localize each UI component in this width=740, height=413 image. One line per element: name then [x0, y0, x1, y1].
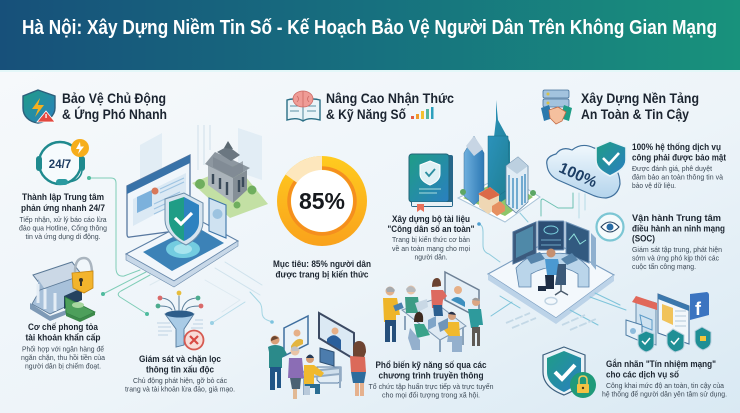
illustration: city skyline: [458, 100, 540, 222]
illustration: bank with padlock and cash: [30, 258, 95, 322]
icon: shield with warning: [23, 90, 55, 123]
text: monitoring and filtering: thông tin xấu độc: [146, 364, 214, 374]
text: emergency account freeze: Cơ chế phong tỏa: [28, 322, 98, 332]
text: handbook: [388, 214, 474, 262]
icon: safety handbook: [409, 154, 453, 212]
text: SOC: (SOC): [632, 234, 655, 244]
icon: cloud with 100% and shield: 100%: [556, 160, 600, 191]
text: trust label: Gắn nhãn "Tín nhiệm mạng": [606, 358, 716, 369]
text: emergency account freeze: [21, 322, 105, 370]
icon: servers and handshake: [541, 90, 572, 124]
text: trust label: Công khai mức độ an toàn, tin cậy của: [606, 381, 724, 390]
heading: proactive protection: [62, 91, 167, 122]
illustration: security operations centre: [488, 193, 626, 330]
text: 24/7 response center: Tiếp nhận, xử lý báo cáo lừa: [20, 215, 107, 224]
heading: safe and trusted foundation: [581, 91, 699, 122]
panel: proactive protection: [19, 90, 268, 394]
connector lines: left column: [87, 176, 262, 325]
text: SOC: [632, 213, 725, 271]
heading: awareness and skills: & Kỹ Năng Số: [326, 107, 406, 122]
icon: eye in ring: [596, 214, 624, 240]
icon: cloud with 100% and shield: [547, 141, 626, 198]
text: emergency account freeze: tài khoản khẩn cấp: [26, 332, 101, 342]
text: skills dissemination: [368, 360, 494, 400]
text: monitoring and filtering: trang và tài khoản lừa đảo, giả mạo.: [125, 384, 235, 394]
text: 24/7 response center: tin và ứng dụng di động.: [26, 232, 100, 241]
heading: safe and trusted foundation: Xây Dựng Nền Tảng: [581, 91, 699, 106]
text: 24/7 response center: [19, 192, 107, 241]
text: trust label: cho các dịch vụ số: [606, 370, 680, 380]
text: monitoring and filtering: Giám sát và chặn lọc: [139, 354, 221, 364]
text: monitoring and filtering: Chủ động phát hiện, gỡ bỏ các: [133, 376, 227, 385]
heading: awareness and skills: Nâng Cao Nhận Thức: [326, 91, 454, 106]
heading: awareness and skills: [326, 91, 454, 122]
text: SOC: Vận hành Trung tâm: [632, 213, 721, 223]
connector lines: centre: [250, 213, 528, 324]
text: skills dissemination: cho mọi đối tượng trong xã hội.: [382, 390, 480, 400]
text: emergency account freeze: người dân bị chiếm đoạt.: [25, 362, 101, 370]
heading: safe and trusted foundation: An Toàn & Tin Cậy: [581, 107, 689, 122]
text: skills dissemination: chương trình truyền thông: [378, 370, 484, 380]
text: 24/7 response center: phản ứng nhanh 24/7: [21, 203, 105, 213]
icon: 24/7 clock headset: 24/7: [49, 159, 71, 171]
text: skills dissemination: Tổ chức tập huấn trực tiếp và trực tuyến: [368, 382, 494, 391]
icon: filter funnel: [156, 291, 204, 350]
icon: brain on open book: [287, 91, 320, 121]
chart: 85% donut: [277, 156, 367, 246]
text: 100% secured services: 100% hệ thống dịch vụ: [632, 142, 721, 152]
text: SOC: Giám sát tập trung, phát hiện: [632, 245, 722, 254]
text: 85% target: [273, 259, 371, 280]
panel: safe and trusted foundation: [541, 90, 727, 398]
text: handbook: người dân.: [414, 252, 448, 262]
text: monitoring and filtering: [125, 354, 235, 394]
illustration: online services with trust badges: f: [695, 299, 702, 319]
illustration: online services with trust badges: [626, 292, 711, 352]
text: 24/7 response center: đảo qua Hotline, Cổng thông: [19, 224, 107, 232]
icon: signal bars: [411, 107, 434, 119]
heading: proactive protection: Bảo Vệ Chủ Động: [62, 91, 166, 106]
text: 24/7 response center: Thành lập Trung tâm: [22, 192, 104, 202]
text: trust label: hệ thống để người dân yên tâm sử dụng.: [602, 390, 727, 398]
text: 85% target: được trang bị kiến thức: [276, 270, 369, 280]
illustration: laptop screen with shield and Hanoi tower: [126, 125, 268, 287]
icon: 24/7 clock headset: [36, 139, 89, 185]
text: skills dissemination: Phổ biến kỹ năng số qua các: [376, 360, 487, 370]
title banner: [0, 0, 740, 72]
illustration: training group around a table: [383, 272, 483, 352]
text: 100% secured services: [632, 142, 726, 190]
text: handbook: "Công dân số an toàn": [388, 224, 474, 234]
icon: shield with padlock: [543, 347, 596, 398]
text: emergency account freeze: ngăn chặn, thu hồi tiền của: [21, 353, 105, 362]
text: 100% secured services: công phải được bảo mật: [632, 152, 726, 162]
heading: proactive protection: & Ứng Phó Nhanh: [62, 107, 167, 122]
text: 100% secured services: Được đánh giá, phê duyệt: [632, 164, 712, 173]
text: handbook: về an toàn mạng cho mọi: [392, 244, 470, 253]
illustration: people at video screens: [268, 313, 366, 399]
chart: 85% donut: 85%: [299, 188, 345, 214]
text: handbook: Xây dựng bộ tài liệu: [392, 214, 470, 224]
text: 100% secured services: bảo vệ dữ liệu.: [632, 181, 676, 190]
text: 100% secured services: đảm bảo an toàn thông tin và: [632, 172, 723, 182]
text: SOC: điều hành an ninh mạng: [632, 224, 725, 234]
text: emergency account freeze: Phối hợp với ngân hàng để: [22, 344, 104, 354]
text: handbook: Trang bị kiến thức cơ bản: [392, 235, 470, 244]
text: SOC: cuộc tấn công mạng.: [632, 262, 696, 271]
panel: awareness and skills: [268, 91, 494, 400]
text: 85% target: Mục tiêu: 85% người dân: [273, 259, 371, 269]
text: trust label: [602, 358, 727, 398]
text: SOC: sớm và ứng phó kịp thời các: [632, 254, 719, 262]
